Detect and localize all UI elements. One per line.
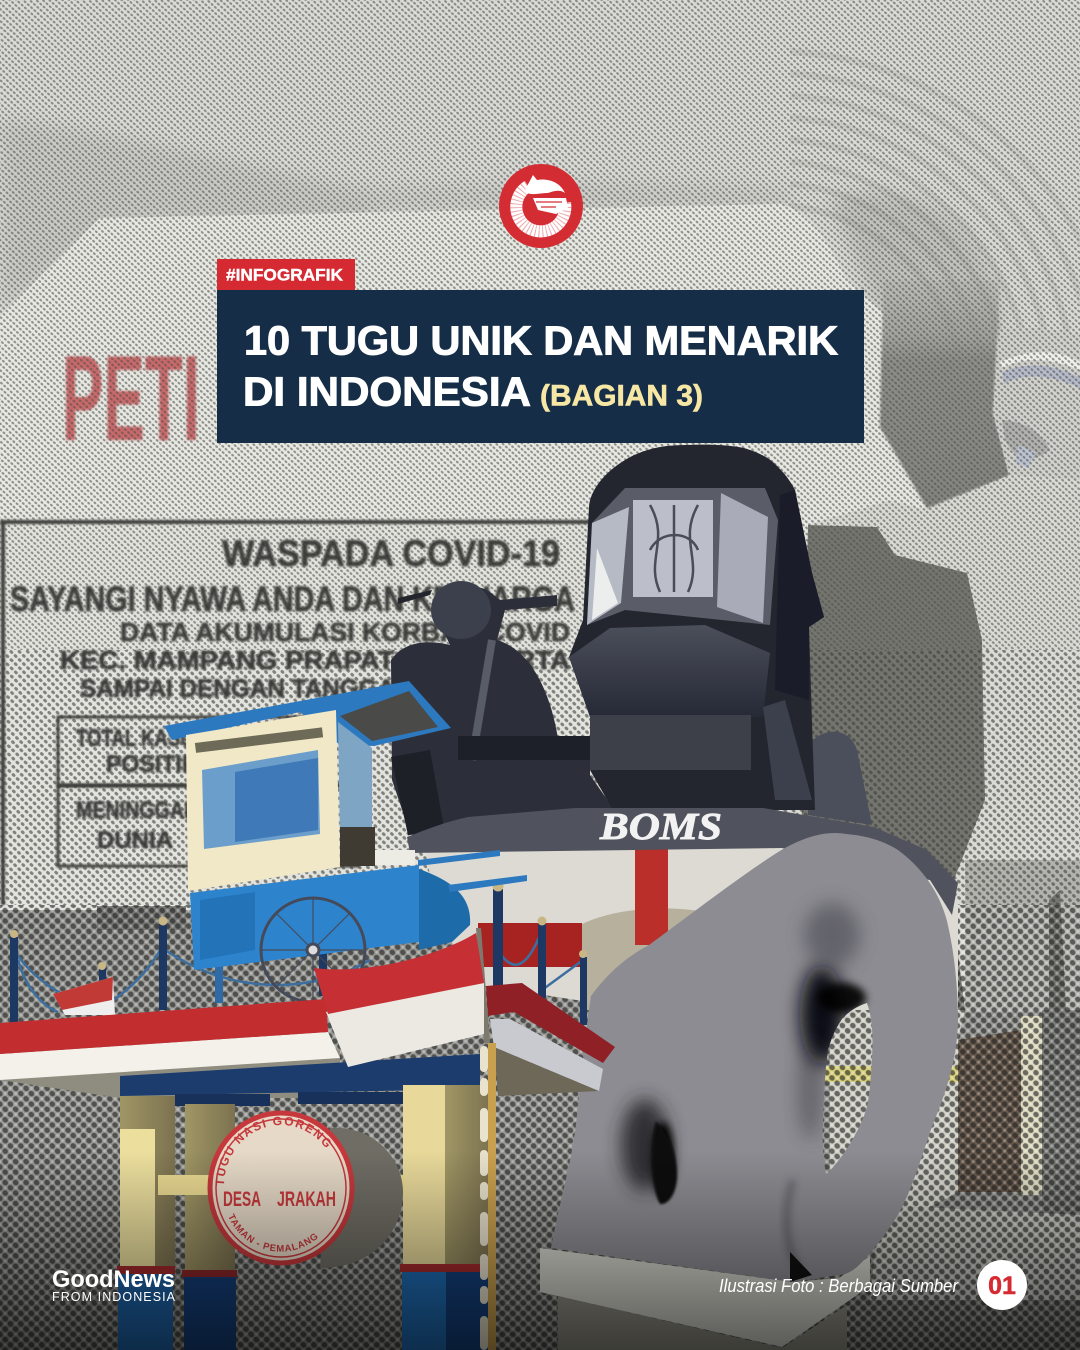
nasi goreng sign: TAMAN - PEMALANG [228,1213,318,1252]
page number badge [977,1260,1027,1310]
covid sign board: KEC. MAMPANG PRAPATAN JAKARTA [60,645,570,675]
nasi goreng sign: DESA [223,1188,261,1211]
rear right wheel [808,732,872,825]
flagpole [476,928,490,1043]
covid sign board: MENINGGAL [76,797,196,824]
platform white fascia [0,1032,340,1080]
dark figure backdrop [800,525,985,1010]
carriage window centre [633,500,713,597]
page number badge: 01 [988,1272,1016,1300]
dark patches on ground [97,906,186,930]
lower street ground [0,905,1080,1350]
carriage strut [763,700,812,800]
grey drum behind sign [320,1128,403,1268]
nasi goreng sign [208,1110,354,1266]
small flag [53,977,115,1015]
stone shading [621,903,866,1282]
pillar feet [117,1264,490,1350]
carriage inner band [587,488,778,625]
sky clouds [0,120,1005,330]
ornamental ring [516,186,565,231]
platform red right [486,983,615,1063]
cart wheel [261,898,365,1002]
road and light ground [830,1010,965,1240]
suit lower shading [965,860,1080,1012]
pillars [120,1085,490,1274]
base red panel [478,923,582,967]
platform red fascia [0,999,328,1054]
covid sign board: SAMPAI DENGAN TANGGAL [80,675,410,703]
stone plinth [540,1248,870,1347]
motorcycle [391,581,613,835]
cart railing posts and chains [10,880,587,1025]
cart handles [418,850,527,892]
dark gap beside tent [880,280,1010,508]
carriage hood [569,625,770,717]
stone pedestal [558,1296,847,1350]
carriage window right [717,493,768,623]
title line one: 10 TUGU UNIK DAN MENARIK [244,318,838,364]
base beige shadow [580,908,720,1010]
platform underside left [0,1050,340,1098]
brand wordmark: GoodNews [52,1266,175,1293]
covid sign board: TOTAL KASUS [76,725,206,752]
cart rear [419,869,470,950]
platform blue beam [120,1054,480,1096]
BOMS lettering: BOMS [599,806,722,848]
title part label: (BAGIAN 3) [540,380,703,412]
person's boot [958,1030,1021,1192]
logo G bar [533,198,568,214]
cart blue body [190,865,419,970]
carriage side [775,490,824,700]
base dark ring [407,808,958,915]
bottom dark gradient [0,1150,1080,1350]
hazmat suit body [808,475,1080,1010]
tent roof [0,204,1080,540]
nasi goreng sign: JRAKAH [277,1188,336,1211]
garland pole [484,1043,496,1350]
tag: infografik [217,259,355,290]
logo badge [499,164,583,248]
person head [993,328,1080,480]
cart cabin [186,710,340,891]
swirl lines top right [790,48,1080,510]
cart window [202,750,320,849]
halftone dot overlay medium [0,650,1080,905]
carriage lower panel [590,715,751,770]
cart legs [215,965,223,1003]
sculpture: grey stone ring [540,833,958,1350]
bird head [524,175,565,194]
base red ribbon [635,845,668,945]
halftone dot overlay fine [0,0,1080,650]
monument: vehicle on BOMS base [391,445,958,1010]
stone body [551,833,958,1282]
suit dark strip [1049,890,1066,1010]
photo credit: Ilustrasi Foto : Berbagai Sumber [719,1276,959,1296]
indonesian flag [314,933,484,1067]
covid sign board: WASPADA COVID-19 [222,533,560,574]
carriage window left [587,507,629,625]
brand wordmark [52,1266,176,1304]
carriage shell [569,445,824,810]
cart roof [164,681,451,746]
halftone dot overlay coarse [0,905,1080,1350]
stone small hole [653,1122,677,1204]
covid sign board [0,520,590,910]
bottles [340,827,375,866]
covid sign board: POSITIF [106,751,196,778]
covid sign board: DATA AKUMULASI KORBAN COVID [120,617,570,647]
tag: infografik: #INFOGRAFIK [226,266,343,284]
tent name: PETI [62,330,200,466]
covid sign board: SAYANGI NYAWA ANDA DAN KELUARGA [10,580,575,619]
nasi goreng sign: TUGU NASI GORENG [216,1116,331,1186]
brand wordmark: FROM INDONESIA [52,1290,176,1304]
platform white right [490,1019,603,1091]
title panel [217,290,864,443]
covid sign board: DUNIA [97,827,173,854]
monument: nasi goreng cart [0,681,615,1350]
platform underside right [494,1047,599,1096]
circular base white [425,848,958,1010]
title line two: DI INDONESIA [243,368,531,414]
